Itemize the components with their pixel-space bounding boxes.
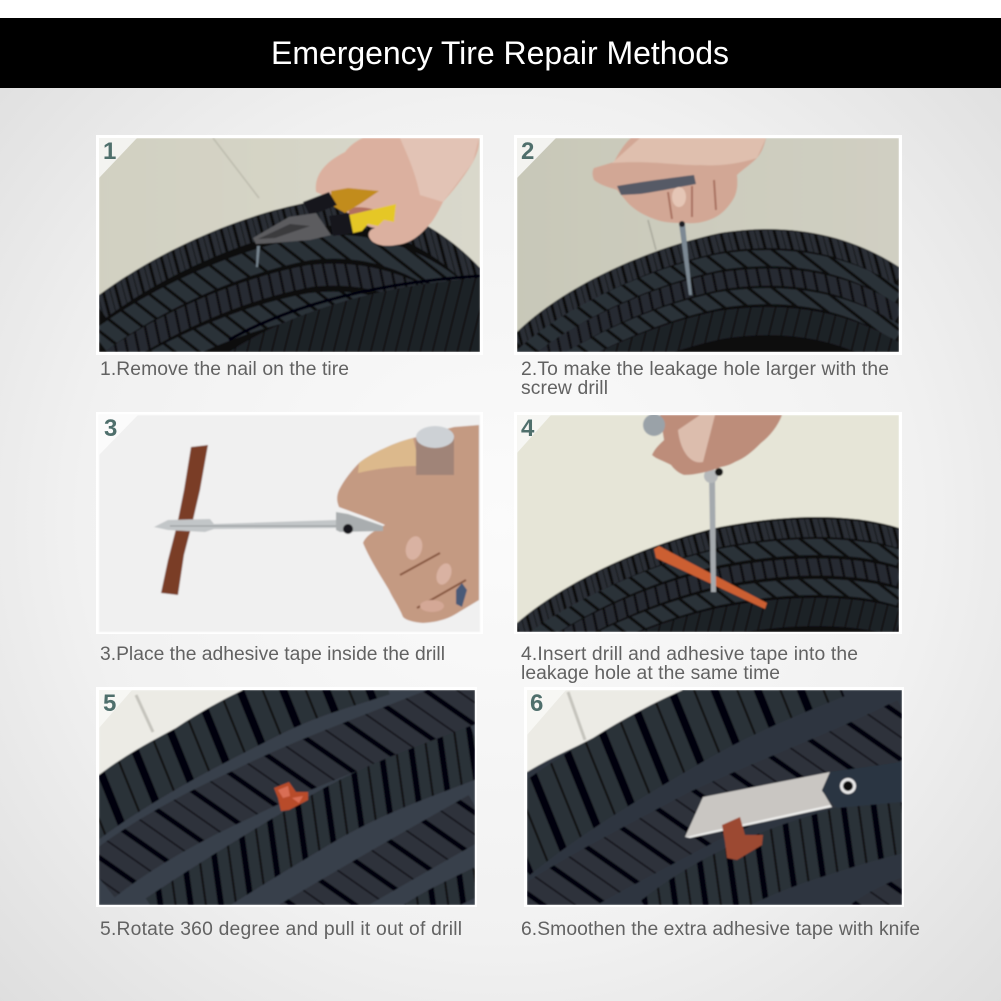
adhesive strip [654, 546, 767, 609]
step corner and number: 2 [521, 138, 534, 165]
title banner: Emergency Tire Repair Methods [271, 35, 729, 71]
adhesive strip [161, 445, 208, 595]
step corner and number: 1 [103, 138, 116, 165]
step corner and number: 6 [530, 690, 543, 717]
panel: step 3 [96, 412, 483, 634]
title banner [0, 18, 1001, 88]
caption 2 [521, 359, 889, 399]
panel: step 2 [514, 135, 902, 355]
step corner and number: 4 [521, 415, 535, 442]
panel: step 1 [96, 135, 483, 355]
step corner and number [517, 138, 556, 178]
tire [527, 690, 902, 905]
tire [517, 516, 899, 632]
drill and hand [643, 414, 782, 592]
caption 1: 1.Remove the nail on the tire [100, 359, 349, 380]
caption 4: 4.Insert drill and adhesive tape into the [521, 644, 858, 665]
caption 5: 5.Rotate 360 degree and pull it out of drill [100, 919, 462, 940]
step corner and number [99, 690, 132, 728]
tire [99, 202, 480, 352]
panel: step 4 [517, 412, 902, 634]
step corner and number [99, 415, 138, 455]
caption 2: 2.To make the leakage hole larger with the [521, 359, 889, 380]
plug [274, 782, 308, 811]
knife [685, 762, 902, 838]
panel: step 5 [96, 687, 477, 907]
tire [517, 228, 899, 352]
tire [99, 690, 475, 905]
plug [722, 817, 763, 860]
caption 6: 6.Smoothen the extra adhesive tape with knife [521, 919, 920, 940]
caption 4: leakage hole at the same time [521, 663, 780, 684]
caption 4 [521, 644, 858, 684]
hand with screw drill [592, 138, 766, 295]
caption 3: 3.Place the adhesive tape inside the drill [100, 644, 445, 665]
step corner and number: 3 [104, 415, 117, 442]
hand with pliers [253, 138, 479, 267]
step corner and number: 5 [103, 690, 116, 717]
step corner and number [99, 138, 137, 178]
panel: step 6 [524, 687, 904, 907]
step corner and number [517, 415, 551, 453]
hand [336, 425, 479, 623]
caption 2: screw drill [521, 378, 608, 399]
drill sleeve [336, 512, 383, 532]
drill [154, 519, 336, 532]
step corner and number [527, 690, 566, 735]
